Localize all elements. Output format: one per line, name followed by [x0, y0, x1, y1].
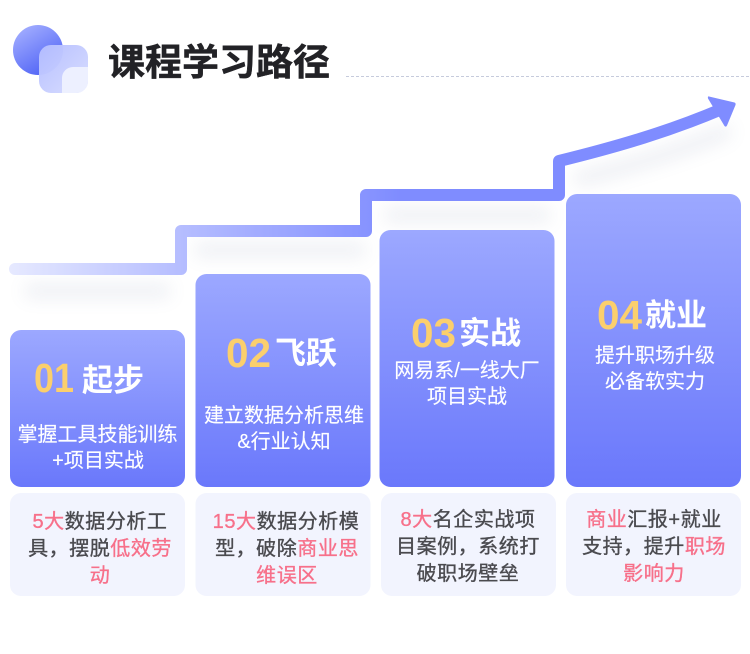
rising stair arrow — [15, 96, 736, 269]
step card 2: 飞跃 — [275, 336, 337, 371]
step card 2: 建立数据分析思维 — [204, 404, 364, 427]
step card 1: 掌握工具技能训练 — [18, 423, 178, 446]
step card 3: 网易系/一线大厂 — [394, 359, 540, 382]
step card 1: 01 — [34, 355, 74, 401]
icon: circle and note — [13, 25, 88, 93]
detail box 2: 维误区 — [256, 564, 318, 587]
detail box 1: 具，摆脱低效劳 — [28, 537, 172, 560]
detail box 2: 15大数据分析模 — [213, 510, 359, 533]
detail box 4: 支持，提升职场 — [582, 535, 726, 558]
title: 课程学习路径 — [108, 42, 330, 83]
detail box 3: 破职场壁垒 — [417, 562, 519, 585]
step card 4: 提升职场升级 — [595, 344, 715, 367]
step card 4: 必备软实力 — [605, 370, 705, 393]
step card 3: 实战 — [459, 316, 521, 351]
step card 3: 项目实战 — [427, 385, 507, 408]
detail box 4: 影响力 — [623, 562, 685, 585]
step card 1: +项目实战 — [52, 449, 144, 472]
detail box 2: 型，破除商业思 — [215, 537, 359, 560]
detail box 1: 5大数据分析工 — [33, 510, 167, 533]
detail box 3 — [381, 493, 556, 596]
step card 2: &行业认知 — [237, 430, 331, 453]
detail box 1 — [10, 493, 185, 596]
step card 2: 02 — [226, 330, 271, 376]
detail box 4: 商业汇报+就业 — [586, 508, 722, 531]
detail box 2 — [196, 493, 370, 596]
step card 3: 03 — [411, 310, 456, 356]
path shadow — [25, 130, 730, 291]
detail box 1: 动 — [90, 564, 110, 587]
detail box 4 — [566, 493, 741, 596]
step card 4 — [566, 194, 741, 487]
detail box 3: 目案例，系统打 — [396, 535, 540, 558]
step card 1 — [10, 330, 185, 487]
step card 3 — [380, 230, 554, 487]
step card 4: 就业 — [645, 298, 707, 333]
step card 4: 04 — [597, 292, 642, 338]
detail box 3: 8大名企实战项 — [401, 508, 535, 531]
step card 1: 起步 — [82, 363, 144, 398]
step card 2 — [196, 274, 370, 487]
